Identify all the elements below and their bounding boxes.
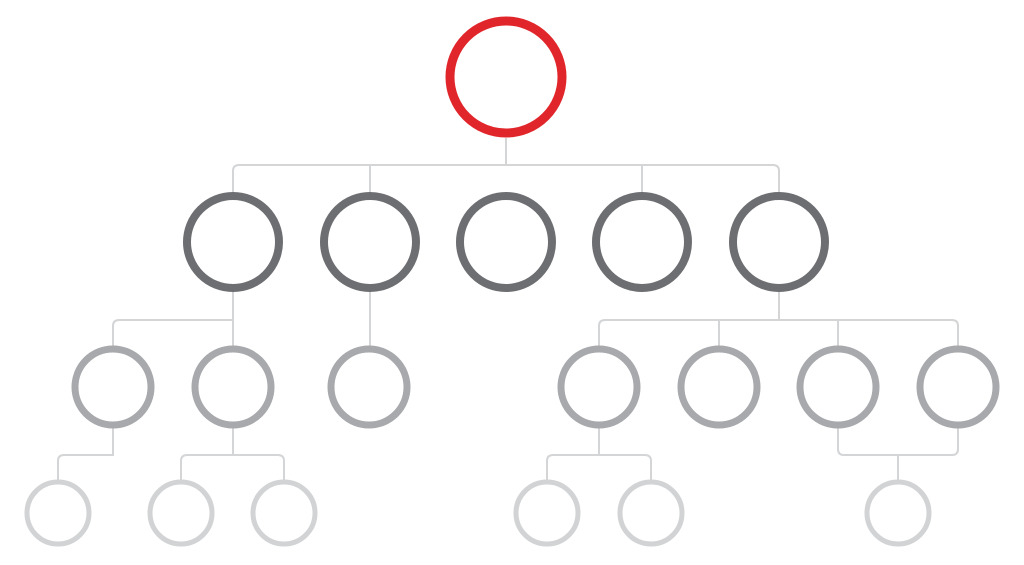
root node [450, 21, 562, 133]
level 4 nodes [27, 482, 929, 544]
level 3 nodes [75, 349, 996, 425]
level 2 nodes [187, 196, 825, 288]
connector lines [58, 138, 958, 480]
